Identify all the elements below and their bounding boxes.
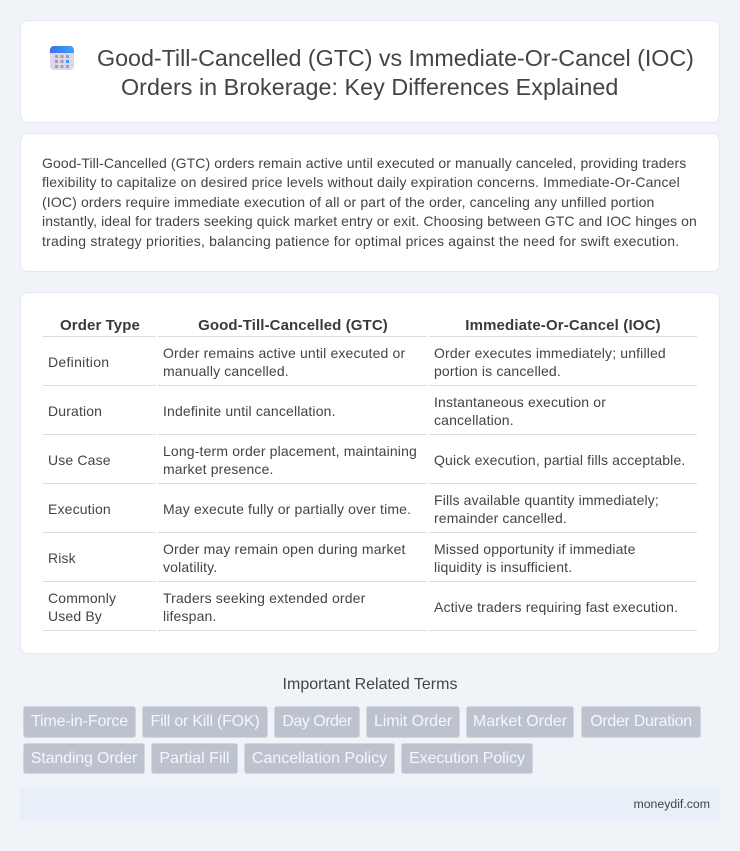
intro paragraph: trading strategy priorities, balancing patience for optimal prices against the need for swift execution.	[42, 233, 679, 249]
row: commonly used by: Used By	[48, 608, 102, 624]
row: duration: cancellation.	[434, 412, 514, 428]
intro text panel	[20, 133, 720, 272]
row: duration: Instantaneous execution or	[434, 394, 606, 410]
tag	[366, 706, 460, 738]
row: commonly used by: Commonly	[48, 590, 116, 606]
row: execution: May execute fully or partially over time.	[163, 501, 411, 517]
row: duration: Indefinite until cancellation.	[163, 403, 336, 419]
title	[97, 45, 694, 100]
row: use case	[48, 443, 685, 477]
related terms tags	[23, 706, 701, 774]
row: commonly used by	[48, 590, 678, 624]
row: definition: Definition	[48, 354, 109, 370]
header panel	[20, 20, 720, 123]
tag	[581, 706, 701, 738]
row: risk: Order may remain open during market	[163, 541, 406, 557]
intro paragraph	[42, 155, 697, 249]
row: definition: portion is cancelled.	[434, 363, 561, 379]
tag: Day Order	[282, 713, 352, 730]
row: execution: Fills available quantity immediately;	[434, 492, 659, 508]
row: commonly used by: lifespan.	[163, 608, 216, 624]
row: execution	[48, 492, 659, 526]
row: commonly used by: Active traders requiring fast execution.	[434, 599, 678, 615]
intro paragraph: flexibility to capitalize on desired price levels without daily expiration concerns. Immediate-Or-Cancel	[42, 174, 680, 190]
row: use case: Quick execution, partial fills acceptable.	[434, 452, 685, 468]
tag	[23, 706, 136, 738]
tag	[151, 743, 238, 774]
row: risk	[48, 541, 636, 575]
tag	[142, 706, 268, 738]
intro paragraph: instantly, ideal for traders seeking quick market entry or exit. Choosing between GTC and IOC hinges on	[42, 213, 697, 229]
row: risk: volatility.	[163, 559, 217, 575]
row: use case: Long-term order placement, maintaining	[163, 443, 417, 459]
tag: Standing Order	[31, 750, 137, 767]
row: definition: manually cancelled.	[163, 363, 289, 379]
tag	[466, 706, 574, 738]
row: use case: market presence.	[163, 461, 274, 477]
tag: Fill or Kill (FOK)	[151, 713, 259, 730]
comparison table panel	[20, 292, 720, 654]
title: Orders in Brokerage: Key Differences Explained	[121, 74, 618, 100]
table header: Immediate-Or-Cancel (IOC)	[465, 317, 661, 334]
tag: Time-in-Force	[31, 713, 128, 730]
tag	[23, 743, 145, 774]
tag	[274, 706, 360, 738]
row: definition: Order remains active until executed or	[163, 345, 405, 361]
source credit: moneydif.com	[633, 797, 710, 811]
tag: Execution Policy	[409, 750, 525, 767]
row: risk: Risk	[48, 550, 76, 566]
row: risk: Missed opportunity if immediate	[434, 541, 636, 557]
tag: Limit Order	[374, 713, 452, 730]
tag: Market Order	[473, 713, 567, 730]
intro paragraph: (IOC) orders require immediate execution of all or part of the order, canceling any unfilled portion	[42, 194, 654, 210]
icon: calendar	[50, 46, 74, 70]
row: execution: Execution	[48, 501, 111, 517]
row: duration: Duration	[48, 403, 102, 419]
tag	[401, 743, 533, 774]
tag	[244, 743, 395, 774]
table header: Good-Till-Cancelled (GTC)	[198, 317, 388, 334]
row: use case: Use Case	[48, 452, 111, 468]
footer bar	[20, 787, 720, 821]
tag: Partial Fill	[159, 750, 230, 767]
row: commonly used by: Traders seeking extended order	[163, 590, 365, 606]
tag: Cancellation Policy	[252, 750, 387, 767]
tag: Order Duration	[590, 713, 692, 730]
row: execution: remainder cancelled.	[434, 510, 567, 526]
row: definition: Order executes immediately; unfilled	[434, 345, 666, 361]
intro paragraph: Good-Till-Cancelled (GTC) orders remain active until executed or manually canceled, providing traders	[42, 155, 686, 171]
row: duration	[48, 394, 606, 428]
table header: Order Type	[60, 317, 140, 334]
title: Good-Till-Cancelled (GTC) vs Immediate-Or-Cancel (IOC)	[97, 45, 694, 71]
related terms heading: Important Related Terms	[283, 676, 457, 693]
row: definition	[48, 345, 666, 379]
table header	[60, 317, 661, 334]
row: risk: liquidity is insufficient.	[434, 559, 572, 575]
